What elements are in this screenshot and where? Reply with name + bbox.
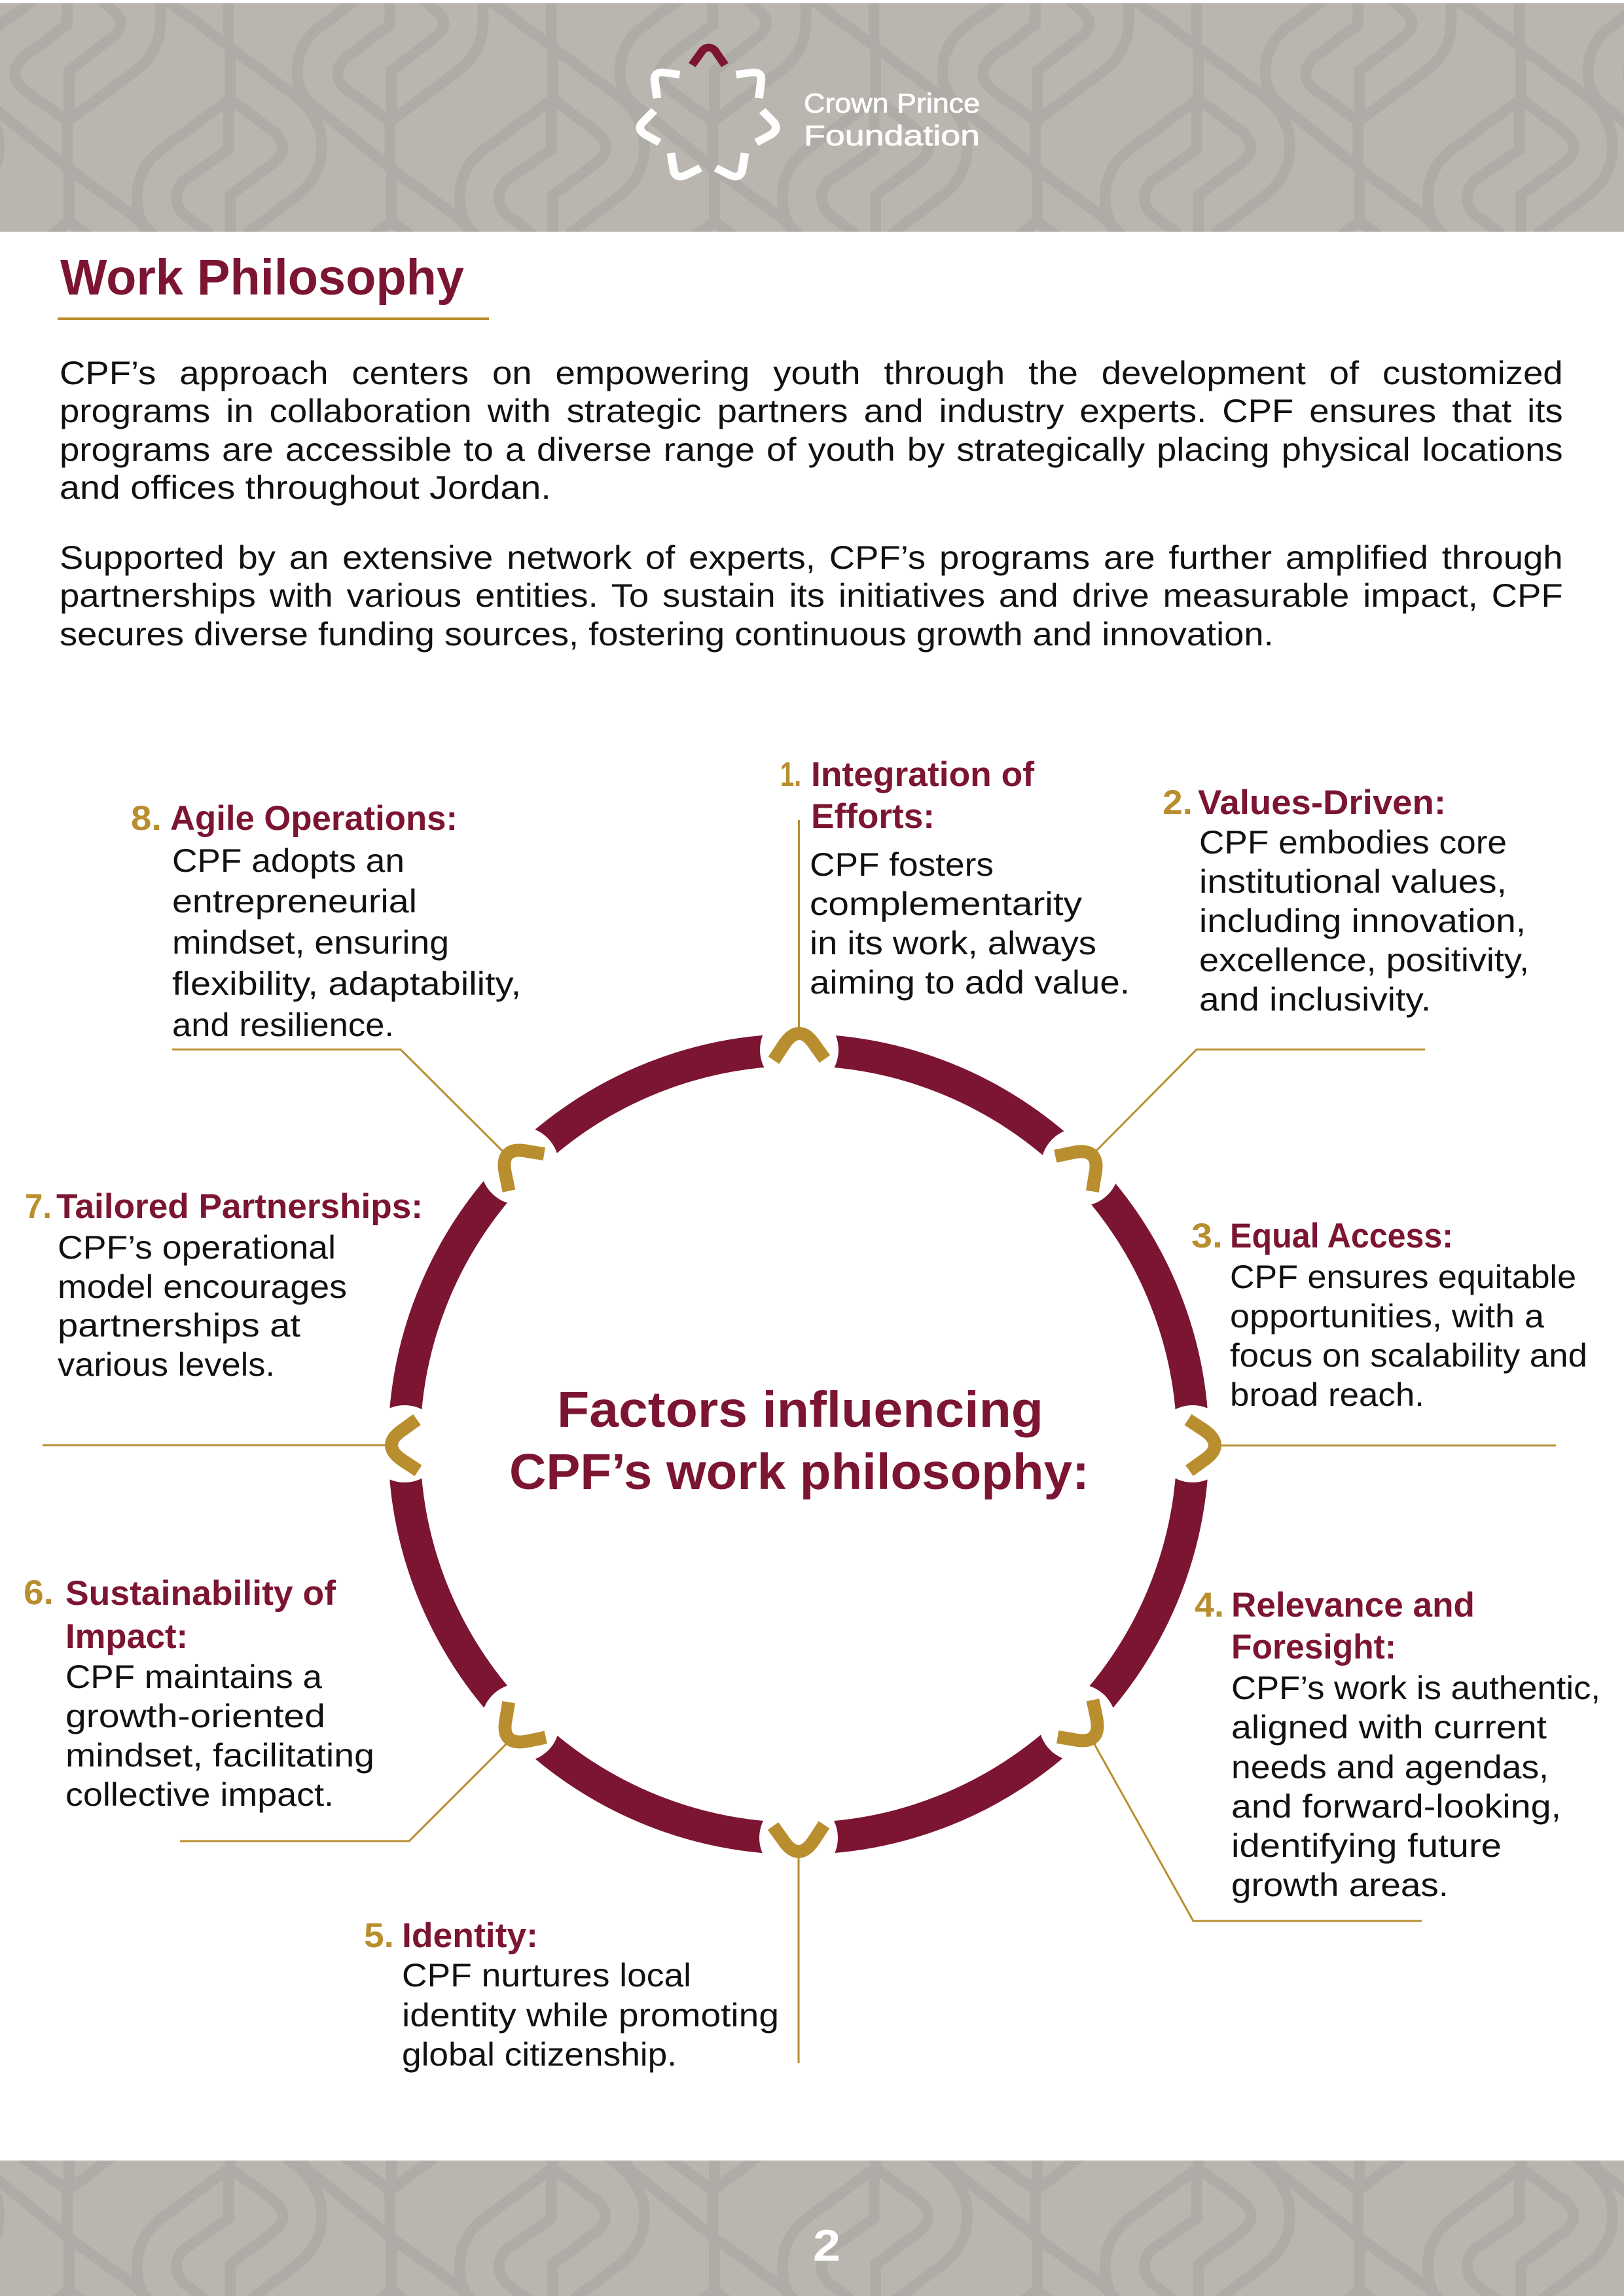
factor 6: Sustainability of Impact: Sustainability of [65, 1574, 336, 1613]
factor 1: Integration of Efforts: aiming to add value. [810, 964, 1130, 1001]
factor 6: Sustainability of Impact [24, 1573, 374, 1813]
factor 7: Tailored Partnerships: model encourages [58, 1268, 347, 1305]
factor 7: Tailored Partnerships: CPF’s operational [58, 1229, 336, 1266]
factor 4: Relevance and Foresight: needs and agendas, [1231, 1749, 1549, 1785]
factor 3: Equal Access: 3. [1191, 1217, 1223, 1255]
factor 6: Sustainability of Impact: Impact: [65, 1617, 188, 1656]
logo: Crown Prince Foundation [640, 47, 980, 177]
factor 2: Values-Driven: including innovation, [1199, 903, 1526, 939]
intro paragraph 2: secures diverse funding sources, fostering continuous growth and innovation. [60, 616, 1274, 653]
factor 5: Identity: Identity: [402, 1916, 538, 1955]
intro paragraph 1: programs are accessible to a diverse range of youth by strategically placing physical locations [60, 431, 1563, 468]
factor 6: Sustainability of Impact: 6. [24, 1573, 54, 1612]
factor 6: Sustainability of Impact: growth-oriented [65, 1698, 325, 1734]
factor 1: Integration of Efforts: in its work, always [810, 925, 1096, 961]
factor 5: Identity: global citizenship. [402, 2036, 677, 2073]
factor 4: Relevance and Foresight: Relevance and [1231, 1586, 1475, 1624]
factor 8: Agile Operations: 8. [131, 799, 162, 838]
intro paragraph 2: partnerships with various entities. To sustain its initiatives and drive measurable impact, CPF [60, 577, 1563, 614]
factor 5: Identity [364, 1916, 779, 2073]
factor 3: Equal Access: Equal Access: [1230, 1217, 1453, 1255]
factor 8: Agile Operations: Agile Operations: [170, 799, 458, 838]
factor 2: Values-Driven [1163, 783, 1529, 1018]
factor 1: Integration of Efforts: CPF fosters [810, 846, 994, 883]
factor 2: Values-Driven: 2. [1163, 783, 1193, 822]
intro paragraph 2 [60, 539, 1563, 653]
factor 3: Equal Access [1191, 1217, 1587, 1413]
heading: Work Philosophy: Work Philosophy [60, 249, 464, 306]
intro paragraph 1: programs in collaboration with strategic partners and industry experts. CPF ensures that its [60, 393, 1563, 429]
logo mark [640, 47, 776, 177]
factor 4: Relevance and Foresight: growth areas. [1231, 1867, 1449, 1903]
logo wordmark [804, 88, 980, 152]
factor 1: Integration of Efforts: complementarity [810, 886, 1082, 922]
factor 6: Sustainability of Impact: collective impact. [65, 1776, 334, 1813]
logo wordmark: Foundation [804, 120, 980, 152]
factor 5: Identity: CPF nurtures local [402, 1957, 691, 1994]
factor 4: Relevance and Foresight: CPF’s work is authentic, [1231, 1670, 1600, 1706]
factor 1: Integration of Efforts: Integration of [811, 755, 1034, 794]
intro paragraph 1 [60, 355, 1563, 506]
factor 6: Sustainability of Impact: mindset, facilitating [65, 1737, 374, 1774]
factor 6: Sustainability of Impact: CPF maintains a [65, 1659, 322, 1695]
factor 5: Identity: identity while promoting [402, 1997, 779, 2034]
factor 7: Tailored Partnerships [25, 1187, 423, 1383]
factor 4: Relevance and Foresight: 4. [1195, 1586, 1224, 1624]
factor 3: Equal Access: broad reach. [1230, 1376, 1424, 1413]
factor 2: Values-Driven: Values-Driven: [1198, 783, 1446, 822]
factor 4: Relevance and Foresight: aligned with current [1231, 1709, 1547, 1746]
factor 8: Agile Operations: entrepreneurial [172, 883, 417, 920]
center title: CPF’s work philosophy: [509, 1444, 1089, 1500]
factor 4: Relevance and Foresight: and forward-looking, [1231, 1788, 1561, 1825]
factor 2: Values-Driven: institutional values, [1199, 863, 1507, 900]
ring [366, 1011, 1231, 1877]
factor 7: Tailored Partnerships: partnerships at [58, 1307, 300, 1344]
factor 3: Equal Access: opportunities, with a [1230, 1298, 1544, 1335]
factor 7: Tailored Partnerships: various levels. [58, 1346, 275, 1383]
factor 8: Agile Operations: mindset, ensuring [172, 924, 449, 961]
intro paragraph 1: CPF’s approach centers on empowering youth through the development of customized [60, 355, 1563, 391]
factor 1: Integration of Efforts: 1. [780, 755, 801, 794]
factor 8: Agile Operations: CPF adopts an [172, 842, 405, 879]
page number: 2 [813, 2221, 840, 2270]
factor 8: Agile Operations: and resilience. [172, 1007, 394, 1043]
factor 3: Equal Access: CPF ensures equitable [1230, 1259, 1576, 1295]
factor 8: Agile Operations [131, 799, 521, 1043]
factor 7: Tailored Partnerships: Tailored Partnerships: [56, 1187, 423, 1226]
connector lines [43, 820, 1556, 2063]
factor 3: Equal Access: focus on scalability and [1230, 1337, 1587, 1374]
diagram: factors ring [43, 820, 1556, 2063]
factor 4: Relevance and Foresight [1195, 1586, 1600, 1903]
chevrons [391, 1033, 1215, 1852]
intro paragraph 1: and offices throughout Jordan. [60, 469, 551, 506]
factor 1: Integration of Efforts [780, 755, 1130, 1001]
factor 8: Agile Operations: flexibility, adaptability, [172, 965, 521, 1002]
center title [509, 1382, 1089, 1500]
factor 2: Values-Driven: and inclusivity. [1199, 981, 1431, 1018]
footer band [0, 2161, 1624, 2296]
factor 2: Values-Driven: CPF embodies core [1199, 824, 1507, 861]
factor 4: Relevance and Foresight: identifying future [1231, 1827, 1502, 1864]
factor 7: Tailored Partnerships: 7. [25, 1187, 52, 1226]
factor 4: Relevance and Foresight: Foresight: [1231, 1628, 1396, 1666]
factor 1: Integration of Efforts: Efforts: [811, 797, 935, 836]
factor 2: Values-Driven: excellence, positivity, [1199, 942, 1529, 978]
logo wordmark: Crown Prince [804, 88, 980, 118]
intro paragraph 2: Supported by an extensive network of experts, CPF’s programs are further amplified through [60, 539, 1563, 576]
header band [0, 0, 1624, 238]
center title: Factors influencing [557, 1382, 1043, 1438]
factor 5: Identity: 5. [364, 1916, 394, 1955]
